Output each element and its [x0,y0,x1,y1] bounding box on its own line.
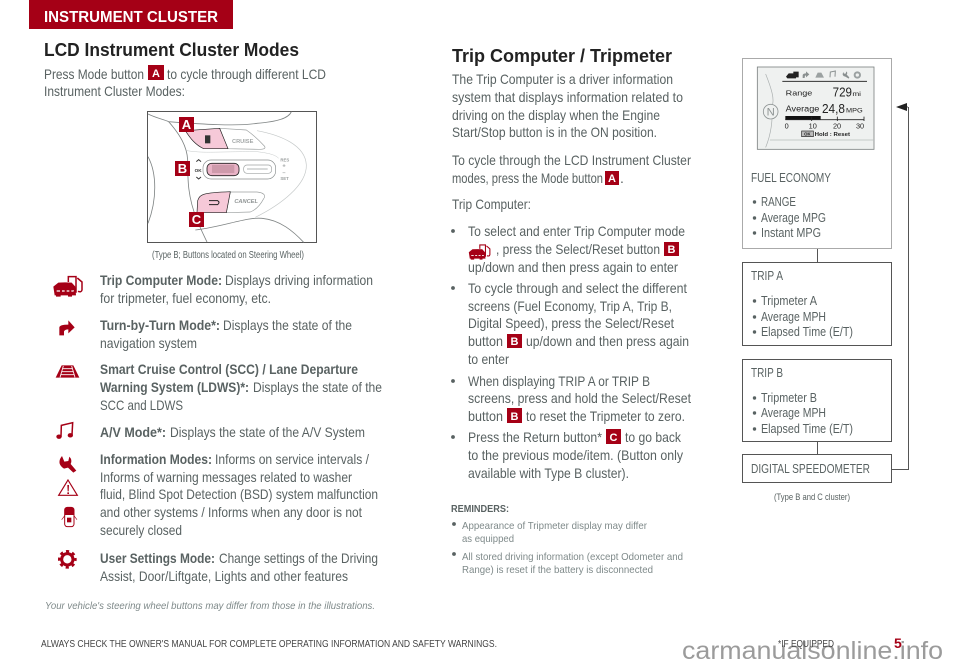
bullet: select trip computer mode [451,223,685,275]
cluster display screen: Hold : Reset [815,132,850,138]
bullet: select trip computer mode: , press the Select/Reset button [496,241,660,257]
bullet: cycle through screens: To cycle through and select the different [468,280,687,296]
panel: trip A: Average MPH [761,309,826,324]
text: turn-by-turn mode [100,317,352,351]
cluster display screen [757,67,874,149]
text: information modes [100,451,378,538]
cluster display screen: Average [786,105,820,114]
text: user settings mode: Assist, Door/Liftgate, Lights and other features [100,568,348,584]
text: smart cruise control: Smart Cruise Control (SCC) / Lane Departure [100,361,358,377]
bullet: return button: to go back [625,429,682,445]
icon: turn-by-turn arrow [59,320,75,335]
cluster display screen: 10 [809,121,817,130]
paragraph: trip computer description: system that displays information related to [452,89,683,105]
cluster display screen: 20 [833,121,841,130]
bullet: reset tripmeter: to reset the Tripmeter to zero. [526,408,685,424]
heading: Trip Computer / Tripmeter: Trip Computer / Tripmeter [452,46,672,66]
paragraph: cycle through modes: modes, press the Mode button [452,170,603,186]
cluster display screen: mi [852,91,862,98]
panel: trip B: Elapsed Time (E/T) [761,421,853,436]
cluster display screen: 729 [833,84,852,99]
panel: digital speedometer [742,454,892,482]
text: information modes: fluid, Blind Spot Detection (BSD) system malfunction [100,486,378,502]
steering wheel button illustration: – [282,170,285,176]
text: information modes: Informs of warning messages related to washer [100,469,352,485]
bullet: cycle through screens: to enter [468,351,509,367]
note: steering wheel disclaimer: Your vehicle's steering wheel buttons may differ from those in the illustrations. [45,600,375,612]
bullet: select trip computer mode: up/down and then press again to enter [468,259,678,275]
paragraph: trip computer description: The Trip Computer is a driver information [452,71,673,87]
bullet: cycle through screens: screens (Fuel Economy, Trip A, Trip B, [468,298,672,314]
steering wheel button illustration: SET [280,176,289,181]
paragraph: trip computer description: Start/Stop button is in the ON position. [452,124,657,140]
bullet: select trip computer mode: B [668,244,676,256]
text: smart cruise control: Displays the state of the [253,379,382,395]
steering wheel button illustration: + [282,163,286,169]
bullet: return button: available with Type B cluster). [468,465,629,481]
bullet: reset tripmeter: screens, press and hold the Select/Reset [468,390,691,406]
reminders block: REMINDERS: [451,503,509,515]
bullet: reset tripmeter: When displaying TRIP A or TRIP B [468,373,650,389]
intro text: press mode button: Instrument Cluster Modes: [44,83,185,99]
heading: LCD Instrument Cluster Modes: LCD Instrument Cluster Modes [44,40,299,60]
cluster display screen: 30 [856,121,864,130]
callout B [175,161,190,176]
steering wheel button illustration [148,112,316,242]
paragraph: cycle through modes: A [608,173,616,185]
fuel economy list: RANGE [761,194,796,209]
fuel economy list: FUEL ECONOMY [751,170,831,185]
text: trip computer mode: Trip Computer Mode: [100,272,222,288]
bullet: reset tripmeter: button [468,408,503,424]
bullet: cycle through screens [451,280,689,367]
watermark: carmanualsonline.info [682,637,943,665]
label: trip computer: Trip Computer: [452,196,531,212]
text: A/V mode: Displays the state of the A/V System [170,424,365,440]
intro text: press mode button [44,65,326,99]
callout A [179,117,194,132]
bullet: return button: to the previous mode/item. (Button only [468,447,683,463]
fuel economy list: Average MPG [761,210,826,225]
text: trip computer mode: for tripmeter, fuel economy, etc. [100,290,271,306]
text: A/V mode: A/V Mode*: [100,424,166,440]
header tab: instrument cluster [29,0,233,29]
reminders block: All stored driving information (except Odometer and [462,551,683,563]
caption: cluster type: (Type B and C cluster) [774,492,850,503]
page number: 5 [894,635,902,651]
text: A/V mode [100,424,365,440]
panel: trip B: Average MPH [761,405,826,420]
reminders block [451,503,683,576]
text: smart cruise control [100,361,382,413]
paragraph: cycle through modes: . [620,170,624,186]
text: turn-by-turn mode: navigation system [100,335,197,351]
footer: if equipped note: *IF EQUIPPED [778,639,834,650]
panel: trip A: Tripmeter A [761,293,817,308]
bullet: cycle through screens: B [511,336,519,348]
bullet: reset tripmeter: B [511,411,519,423]
panel: trip A: Elapsed Time (E/T) [761,324,853,339]
bullet: return button: Press the Return button* [468,429,602,445]
text: smart cruise control: SCC and LDWS [100,397,183,413]
panel: fuel economy [742,58,892,248]
icon: settings gear [59,551,75,567]
bullet: cycle through screens: button [468,333,503,349]
text: information modes: Information Modes: [100,451,212,467]
text: turn-by-turn mode: Turn-by-Turn Mode*: [100,317,220,333]
header tab: instrument cluster: INSTRUMENT CLUSTER [44,9,218,26]
text: user settings mode: User Settings Mode: [100,550,215,566]
intro text: press mode button: A [152,68,160,80]
icon: music note [56,423,73,439]
cluster display screen: 0 [785,121,789,130]
text: user settings mode [100,550,378,584]
fuel economy list [751,170,831,240]
caption: steering wheel: (Type B; Buttons located on Steering Wheel) [152,250,304,261]
cluster display screen: Range [786,88,812,97]
panel: trip B [742,360,892,442]
bullet: cycle through screens: Digital Speed), press the Select/Reset [468,315,674,331]
steering wheel button illustration: RES [280,158,289,163]
text: trip computer mode: Displays driving information [225,272,373,288]
callout B: B [178,161,187,176]
paragraph: cycle through modes: To cycle through the LCD Instrument Cluster [452,152,691,168]
intro text: press mode button: to cycle through different LCD [167,66,326,82]
bullet: return button [451,429,683,481]
text: trip computer mode [100,272,373,306]
paragraph: trip computer description [452,71,683,140]
icon: warning triangle [59,480,77,495]
cluster display screen: OK [804,131,811,136]
flow connectors and return arrow [818,103,908,470]
text: user settings mode: Change settings of the Driving [219,550,378,566]
text: information modes: Informs on service intervals / [215,451,369,467]
text: turn-by-turn mode: Displays the state of the [223,317,352,333]
steering wheel button illustration: CRUISE [232,139,254,145]
panel: trip B: TRIP B [751,365,783,380]
callout A: A [182,117,192,132]
footer: safety warning: ALWAYS CHECK THE OWNER'S MANUAL FOR COMPLETE OPERATING INFORMATION AND SAFETY WARNINGS. [41,639,497,650]
panel: trip A: TRIP A [751,268,783,283]
bullet: cycle through screens: up/down and then press again [526,333,689,349]
callout C: C [192,212,202,227]
bullet: return button: C [610,432,618,444]
icon: trip computer [53,277,82,297]
callout C [189,212,204,227]
bullet: select trip computer mode: To select and enter Trip Computer mode [468,223,685,239]
panel: trip B: Tripmeter B [761,390,817,405]
cluster display screen: 24,8 [822,101,845,116]
paragraph: cycle through modes [452,152,691,186]
cluster display screen: MPG [846,108,863,115]
text: smart cruise control: Warning System (LDWS)*: [100,379,249,395]
cluster display screen: N [767,107,775,119]
icon: open door car [62,507,77,527]
icon: wrench [59,456,76,473]
panel: digital speedometer: DIGITAL SPEEDOMETER [751,461,870,476]
text: information modes: securely closed [100,522,182,538]
text: information modes: and other systems / Informs when any door is not [100,504,362,520]
icon: smart cruise lane road [56,365,79,378]
paragraph: trip computer description: driving on the display when the Engine [452,107,660,123]
panel: trip A [742,262,892,346]
bullet: reset tripmeter [451,373,691,424]
steering wheel button illustration: OK [195,168,202,173]
fuel economy list: Instant MPG [761,225,821,240]
steering wheel button illustration: CANCEL [234,199,258,205]
reminders block: Appearance of Tripmeter display may differ [462,520,647,532]
reminders block: as equipped [462,533,514,545]
intro text: press mode button: Press Mode button [44,66,144,82]
reminders block: Range) is reset if the battery is disconnected [462,564,653,576]
